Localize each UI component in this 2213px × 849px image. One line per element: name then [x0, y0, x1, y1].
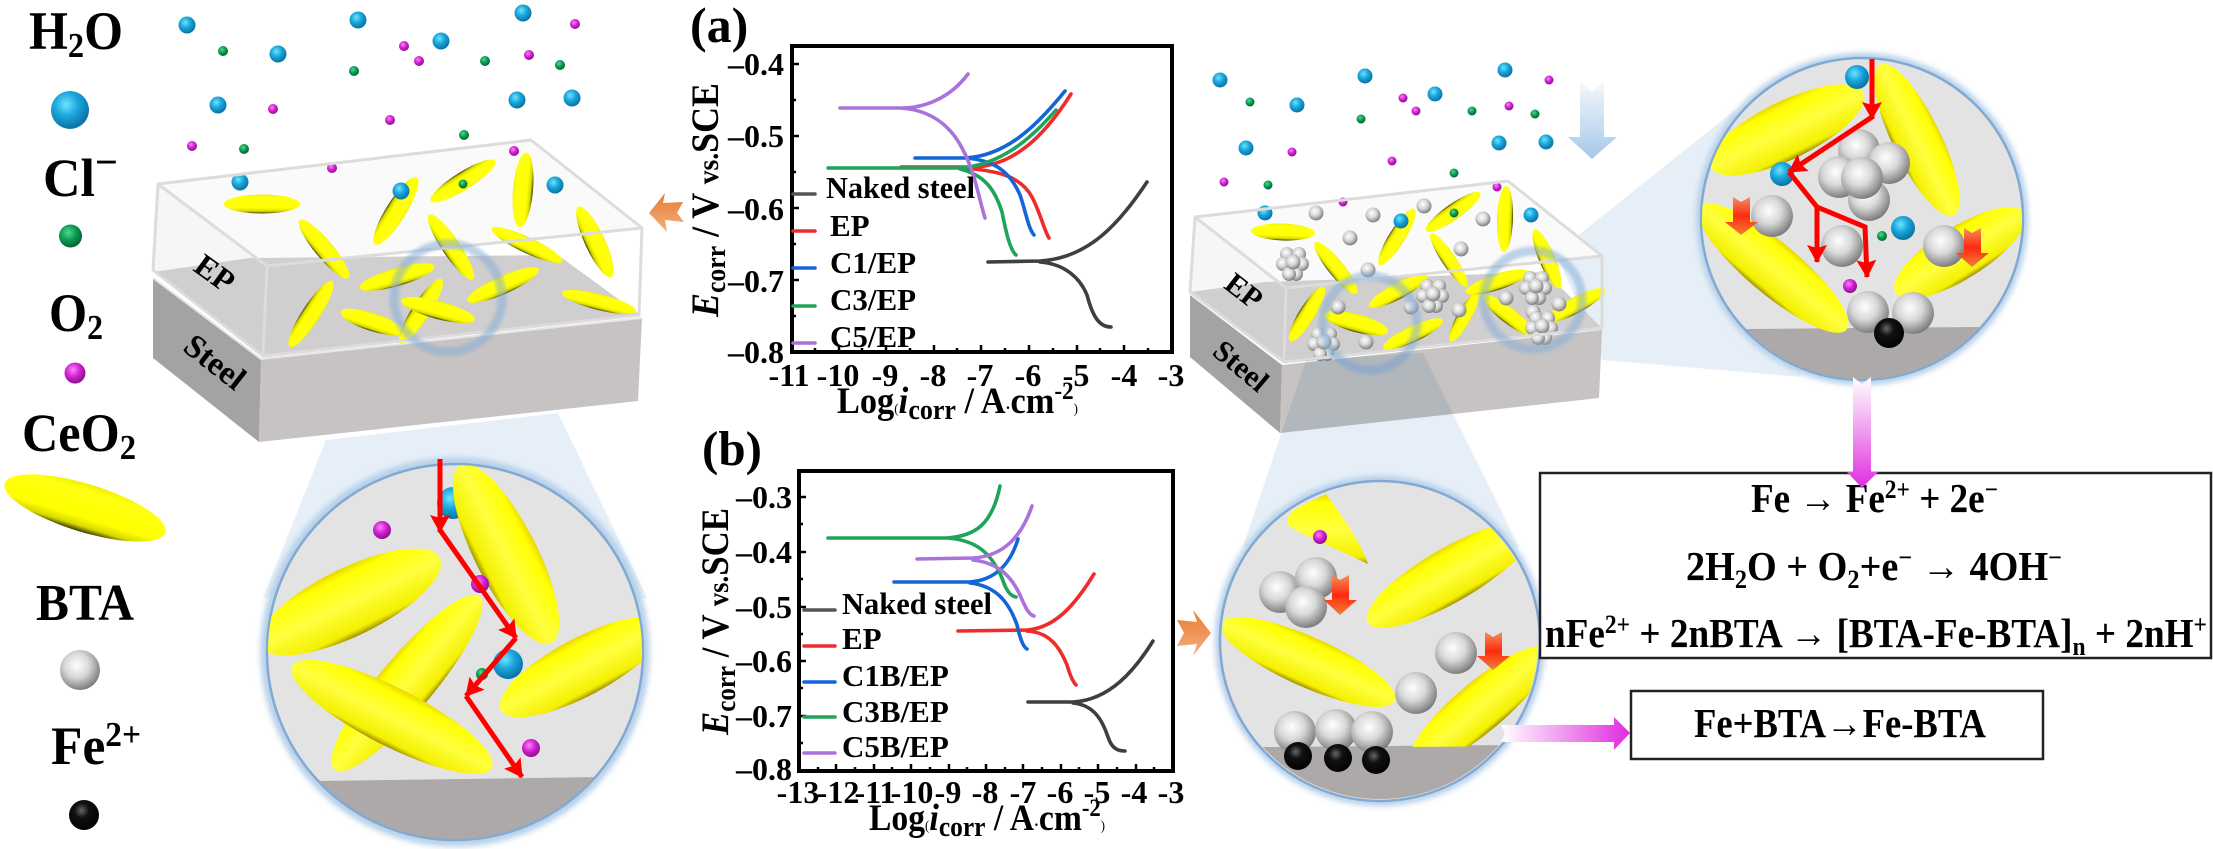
x tick labels: -12 — [817, 774, 859, 810]
curves — [828, 486, 1153, 751]
icon: chloride sphere — [59, 224, 82, 248]
legend label: O2: O — [49, 283, 91, 343]
chart (a): polarization curves — [684, 46, 1184, 426]
arrows: BTA release — [1725, 197, 1989, 267]
callout beam: right coating to lower zoom circle — [1243, 353, 1519, 547]
axis title: x: ) — [1074, 402, 1078, 417]
icon: oxygen sphere — [64, 362, 86, 384]
legend label: CeO2: CeO — [22, 403, 127, 463]
axis title: y: / V — [684, 184, 727, 246]
y tick labels: –0.6 — [735, 643, 792, 679]
axis title: x: ·cm — [1006, 381, 1058, 422]
legend — [793, 170, 975, 354]
arrow: orange pointing right — [1177, 610, 1211, 656]
x tick labels: -8 — [972, 774, 998, 810]
legend label: chloride: − — [95, 140, 118, 186]
legend — [804, 586, 992, 764]
x tick labels: -5 — [1063, 357, 1089, 393]
equation: oxygen reduction: 2 — [1847, 565, 1860, 594]
axis title: x: / A — [956, 381, 1006, 422]
left block: steel with EP coating — [153, 140, 642, 442]
y tick labels: –0.5 — [727, 118, 784, 154]
equation: oxygen reduction: 2H — [1686, 543, 1738, 589]
axis title: x: corr — [939, 812, 985, 843]
heading: (b): (b) — [702, 421, 762, 476]
axis title: x: -2 — [1054, 378, 1074, 405]
legend: C1B/EP — [842, 658, 949, 693]
zoom circle: CeO2/BTA coating inhibitor release lower — [1211, 480, 1565, 805]
arrows: BTA release — [1324, 575, 1510, 670]
arrows: corrosive medium path — [1789, 59, 1872, 277]
x tick labels: -9 — [872, 357, 898, 393]
legend label: H2O: O — [84, 1, 123, 61]
equation: iron oxidation: 2+ — [1885, 475, 1910, 504]
x tick labels: -5 — [1084, 774, 1110, 810]
legend label: H2O: 2 — [68, 26, 84, 65]
x tick labels: -3 — [1158, 774, 1184, 810]
equation: iron oxidation: Fe → Fe — [1751, 475, 1899, 521]
equation: iron oxidation: + 2e — [1910, 475, 1985, 521]
legend label: BTA: BTA — [36, 575, 134, 632]
legend: C3/EP — [830, 282, 916, 317]
BTA spheres and clusters — [1276, 198, 1566, 361]
arrow: pink rightward to Fe-BTA — [1501, 717, 1630, 750]
icon: water sphere — [51, 91, 89, 129]
label: Steel: Steel — [177, 328, 252, 398]
x tick labels: -7 — [967, 357, 993, 393]
legend: EP — [842, 621, 882, 656]
arrow: orange pointing left — [649, 193, 684, 232]
icon: Fe2+ sphere — [69, 800, 99, 830]
equation: oxygen reduction: 2 — [1735, 565, 1747, 594]
equation: BTA complex: nFe — [1545, 610, 1611, 656]
steel substrate — [153, 278, 642, 442]
corrosive species above left coating — [178, 4, 580, 154]
axis title: x: corr — [908, 395, 956, 426]
icon: BTA sphere — [60, 650, 100, 690]
panel: reaction equations — [1540, 473, 2211, 661]
equation: oxygen reduction: → 4OH — [1912, 543, 2048, 589]
legend: Naked steel — [842, 586, 992, 621]
legend label: chloride: Cl — [43, 148, 97, 208]
legend: C5B/EP — [842, 729, 949, 764]
legend: C5/EP — [830, 319, 916, 354]
callout beam: left coating to zoom circle — [263, 413, 647, 598]
species inside coating — [232, 146, 564, 200]
y tick labels: –0.3 — [735, 479, 792, 515]
axis title: y: E — [684, 293, 727, 318]
EP glass box — [153, 140, 642, 356]
species inside coating — [1258, 182, 1538, 228]
zoom circle: EP coating barrier path — [245, 451, 677, 849]
x tick labels — [777, 774, 1184, 810]
legend: Naked steel — [826, 170, 975, 205]
y tick labels — [735, 479, 792, 787]
axis title: y: corr — [701, 246, 732, 293]
y tick labels: –0.5 — [735, 589, 792, 625]
equation: BTA complex: + 2nH — [2086, 610, 2194, 656]
EP glass box — [1190, 181, 1602, 362]
axis title: y: E — [694, 712, 737, 736]
legend: EP — [830, 208, 870, 243]
right block: steel with CeO2/BTA EP coating — [1190, 181, 1609, 433]
equation: BTA complex: + 2nBTA → [BTA-Fe-BTA] — [1630, 610, 2073, 656]
x tick labels: -11 — [855, 774, 895, 810]
x tick labels: -13 — [777, 774, 819, 810]
y tick labels: –0.8 — [727, 334, 784, 370]
equation: BTA complex: + — [2194, 610, 2207, 639]
legend: C3B/EP — [842, 694, 949, 729]
arrow: light blue downward — [1568, 82, 1617, 159]
x tick labels: -6 — [1015, 357, 1041, 393]
y tick labels: –0.4 — [735, 534, 792, 570]
equation: oxygen reduction: +e — [1860, 543, 1898, 589]
axis title: y: vs.SCE — [684, 77, 727, 184]
legend label: O2: 2 — [87, 308, 103, 347]
axis title: y: vs.SCE — [694, 500, 737, 606]
chart (b): polarization curves — [694, 471, 1184, 843]
y tick labels: –0.8 — [735, 751, 792, 787]
legend label: Fe2+: 2+ — [105, 715, 141, 754]
y tick labels: –0.7 — [735, 698, 792, 734]
steel substrate — [1190, 295, 1602, 433]
equation: oxygen reduction: − — [2048, 543, 2062, 572]
CeO2 ellipsoids — [1251, 186, 1609, 355]
axis title: x: ·cm — [1034, 798, 1086, 839]
axis title: x: -2 — [1082, 795, 1101, 822]
icon: CeO2 ellipsoid — [0, 460, 172, 556]
legend label: CeO2: 2 — [120, 428, 136, 467]
x tick labels: -10 — [817, 357, 859, 393]
x tick labels: -4 — [1121, 774, 1147, 810]
axis title: x: ) — [1101, 819, 1105, 834]
axis title: x: Log(i — [837, 380, 909, 422]
x tick labels: -3 — [1158, 357, 1184, 393]
panel: Fe-BTA reaction: Fe+BTA→Fe-BTA — [1694, 700, 1986, 746]
zoom ring — [394, 244, 502, 352]
x tick labels: -9 — [935, 774, 961, 810]
x tick labels: -8 — [920, 357, 946, 393]
x tick labels: -6 — [1047, 774, 1073, 810]
x tick labels: -4 — [1111, 357, 1137, 393]
x tick labels: -10 — [891, 774, 933, 810]
legend label: H2O: H — [29, 1, 71, 61]
curves — [828, 74, 1147, 327]
equation: iron oxidation: − — [1985, 475, 1998, 504]
label: EP: EP — [188, 246, 242, 300]
label: EP: EP — [1218, 267, 1269, 316]
legend: species key — [0, 1, 172, 830]
arrow: pink downward to equations — [1847, 377, 1878, 488]
callout beam: right coating to upper zoom circle — [1556, 110, 1802, 377]
legend label: Fe2+: Fe — [51, 716, 108, 776]
y tick labels: –0.4 — [727, 46, 784, 82]
panel: Fe-BTA reaction — [1631, 691, 2043, 759]
y tick labels: –0.7 — [727, 263, 784, 299]
equation: oxygen reduction: O + O — [1747, 543, 1847, 589]
equation: oxygen reduction: − — [1898, 543, 1912, 572]
axis title: x: / A — [985, 798, 1034, 839]
CeO2 ellipsoids — [224, 152, 638, 352]
arrow: corrosive medium tortuous path — [440, 459, 522, 777]
x tick labels: -7 — [1010, 774, 1036, 810]
label: Steel: Steel — [1206, 334, 1275, 399]
x tick labels — [769, 357, 1184, 393]
corrosive species above right coating — [1212, 62, 1554, 190]
y tick labels — [727, 46, 784, 370]
axis title: x: Log(i — [869, 797, 940, 839]
x tick labels: -11 — [769, 357, 809, 393]
axis title: y: / V — [694, 606, 737, 666]
zoom circle: CeO2/BTA coating inhibitor release upper — [1683, 54, 2038, 385]
equation: BTA complex: n — [2073, 632, 2086, 661]
y tick labels: –0.6 — [727, 191, 784, 227]
legend: C1/EP — [830, 245, 916, 280]
zoom rings — [1323, 251, 1582, 370]
axis title: y: corr — [711, 666, 742, 712]
equation: BTA complex: 2+ — [1605, 610, 1630, 639]
